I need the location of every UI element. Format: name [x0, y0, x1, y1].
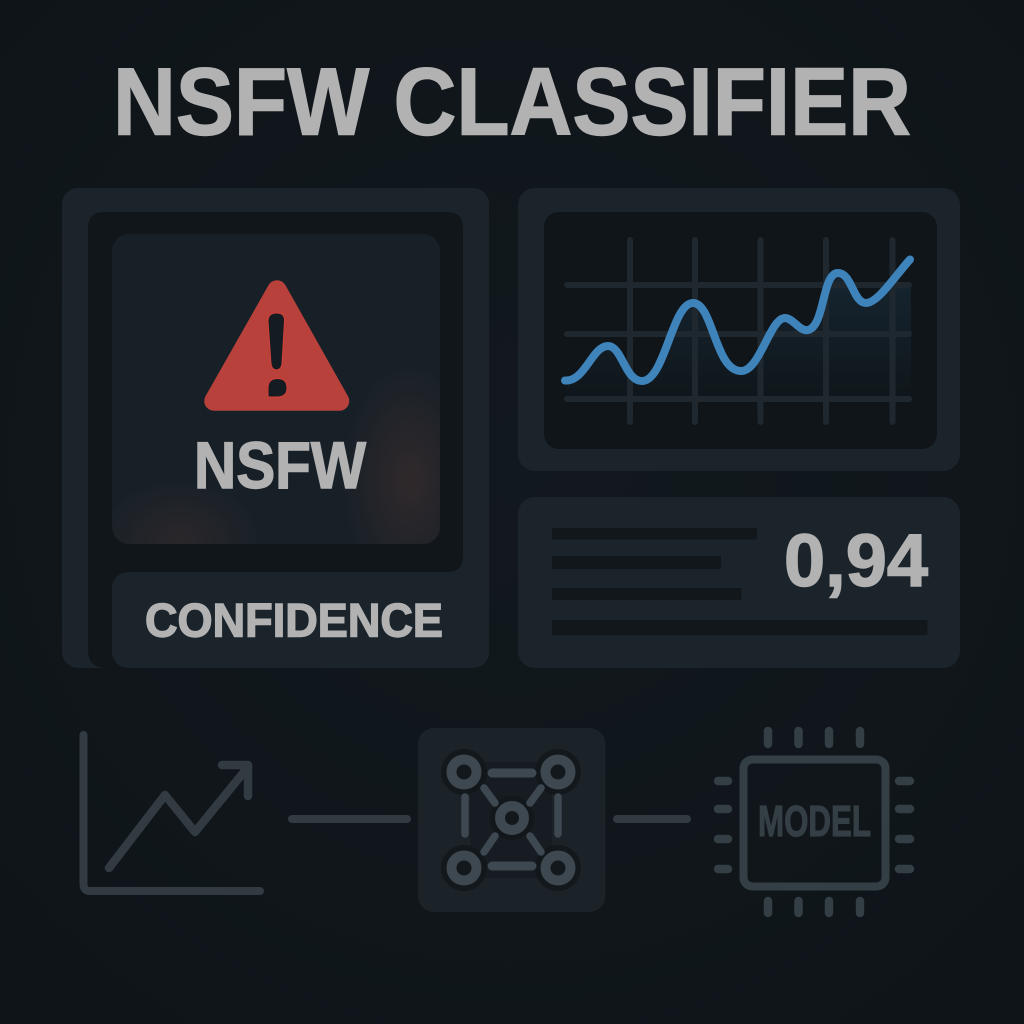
image tile	[112, 234, 440, 544]
label: NSFW: NSFW	[194, 428, 367, 502]
icon: growth chart	[84, 735, 260, 891]
chip label: MODEL	[758, 797, 871, 846]
connector line	[617, 815, 687, 823]
panel: line chart	[518, 188, 960, 471]
network nodes	[452, 760, 570, 880]
title: NSFW CLASSIFIER	[113, 48, 911, 156]
panel: confidence score	[518, 497, 960, 668]
connector line	[292, 815, 407, 823]
score value: 0,94	[784, 519, 928, 602]
confidence label box: CONFIDENCE	[145, 594, 443, 646]
network links	[465, 773, 558, 866]
chart line	[565, 260, 910, 381]
icon: model chip	[718, 731, 910, 913]
panel: NSFW detection	[62, 188, 489, 668]
chart area fill	[565, 273, 911, 399]
inner dark frame	[88, 212, 463, 668]
chip pins	[718, 731, 910, 913]
confidence label box	[112, 572, 489, 668]
node halos	[441, 749, 581, 891]
chart grid	[567, 240, 909, 422]
icon: warning triangle	[214, 290, 340, 401]
icon: neural network tile	[418, 728, 606, 912]
placeholder text bars	[552, 528, 928, 635]
